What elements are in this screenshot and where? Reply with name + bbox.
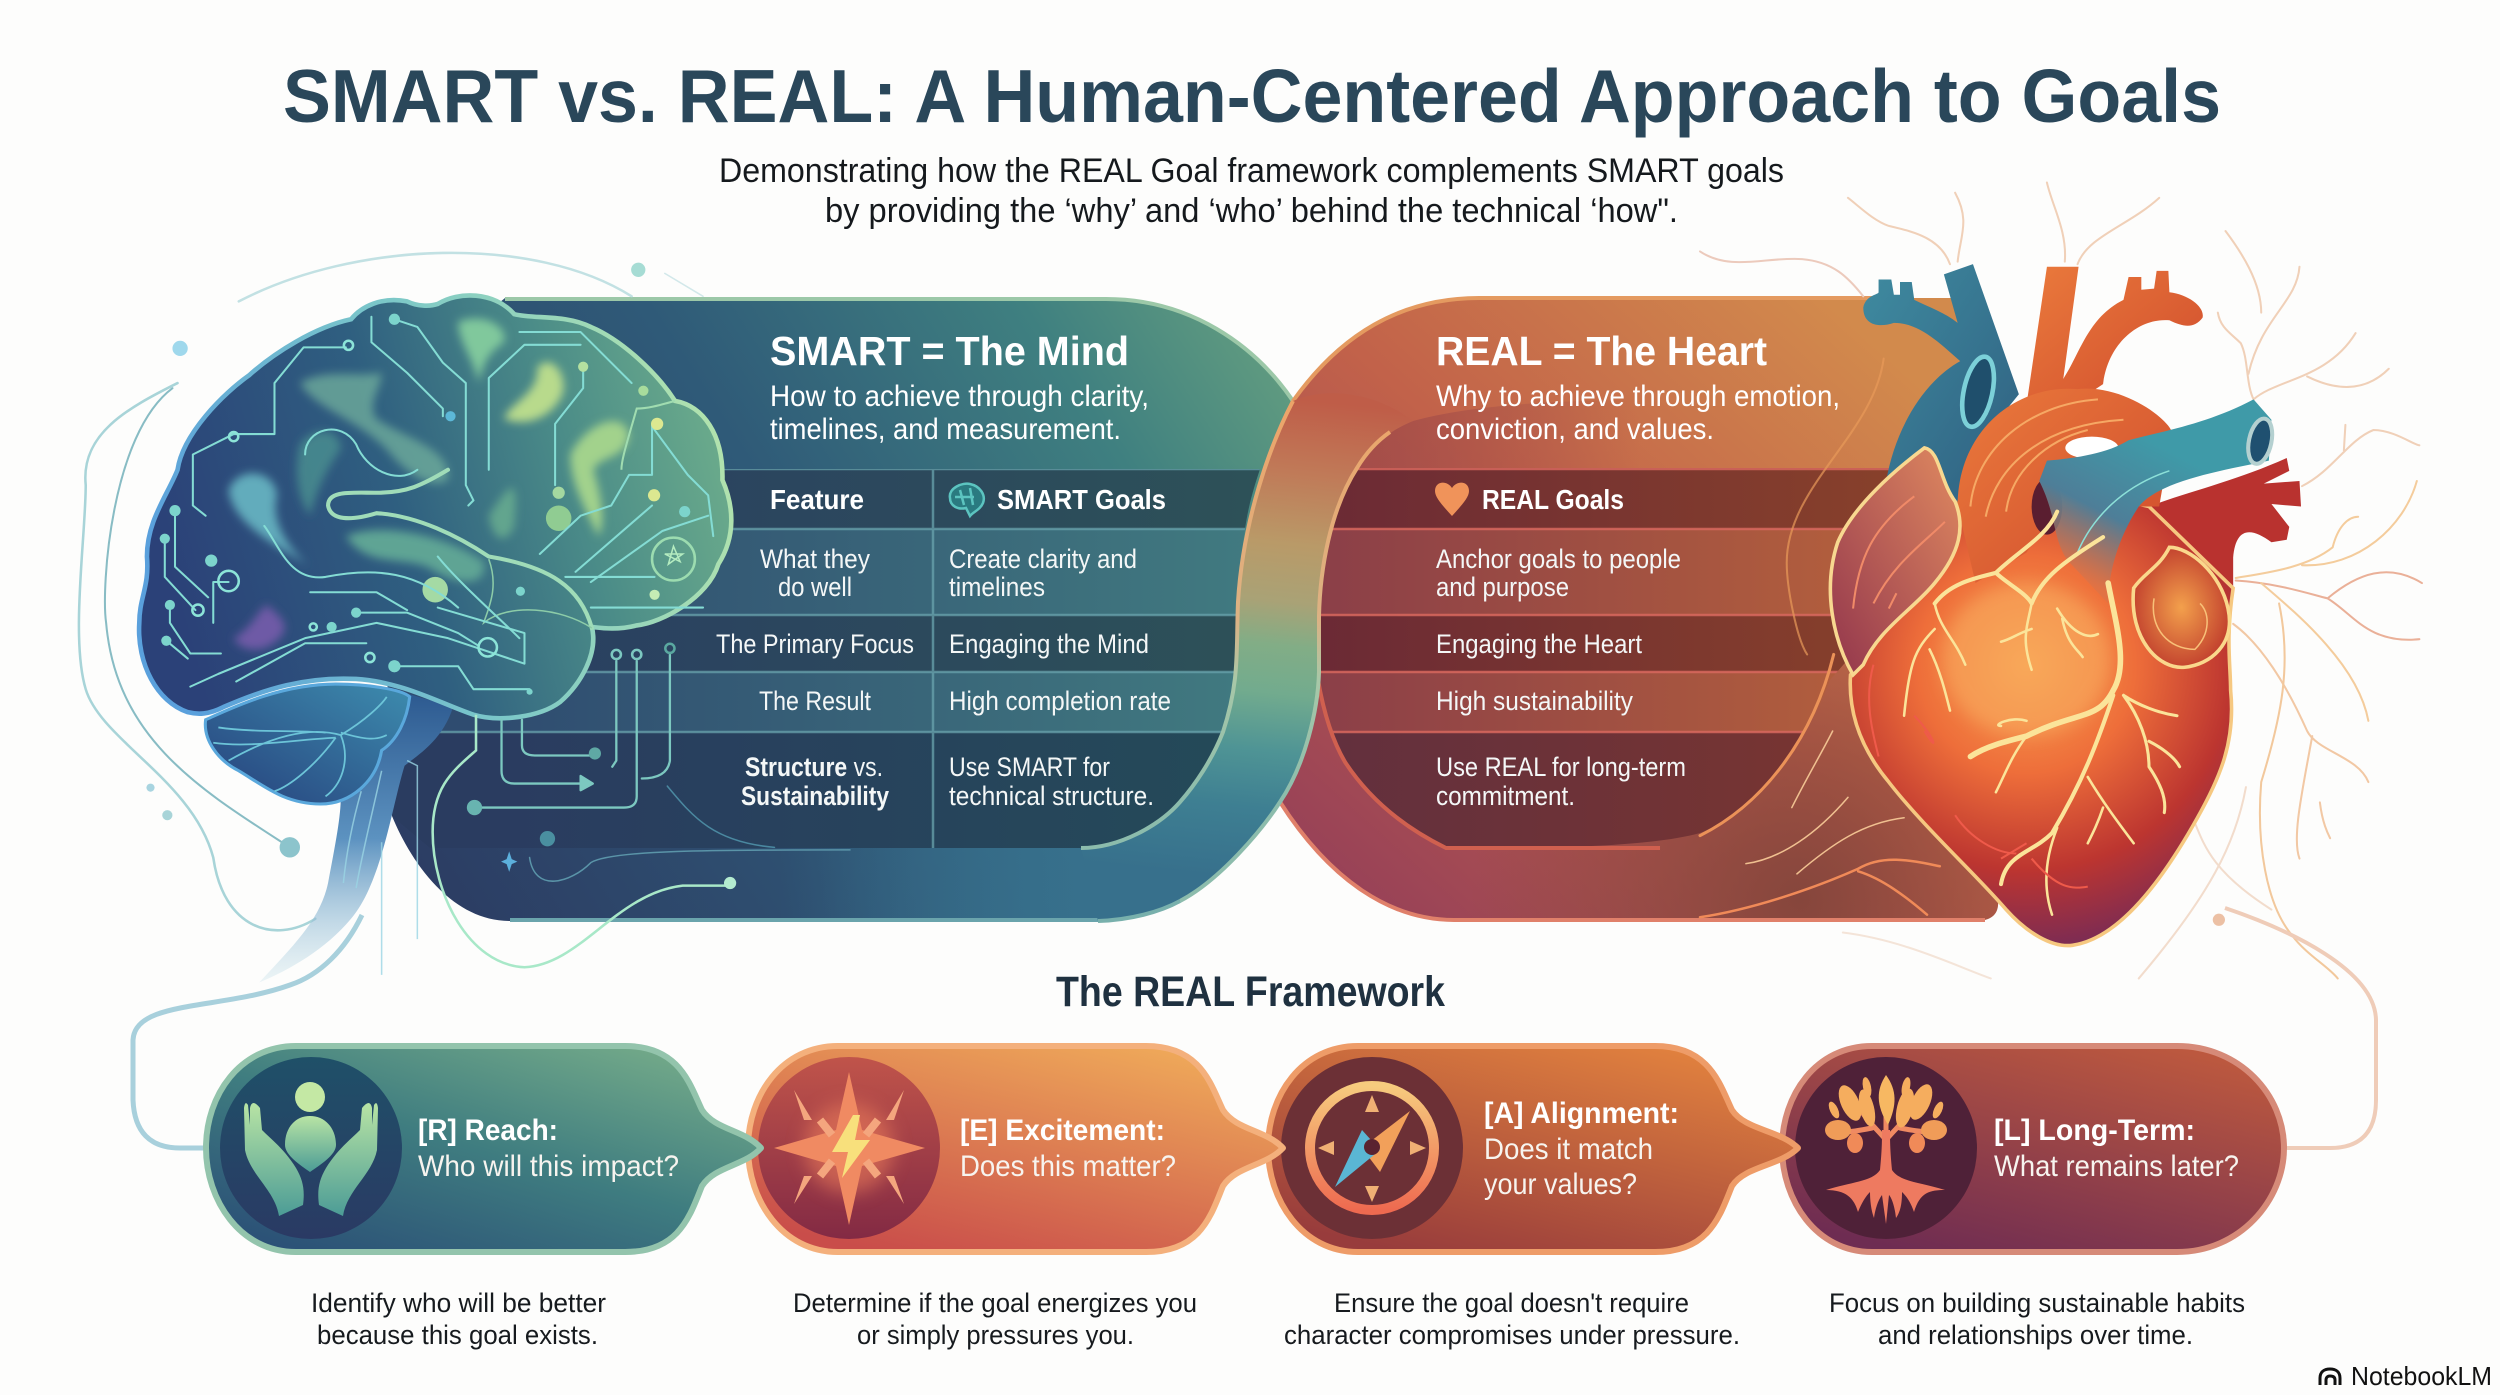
- description: Excitement: [793, 1288, 1197, 1350]
- description: Long-Term: Focus on building sustainable habits: [1829, 1288, 2245, 1318]
- icon: compass: [1310, 1086, 1434, 1210]
- SMART header text: SMART = The Mind: [770, 328, 1129, 374]
- subtitle: by providing the ‘why’ and ‘who’ behind the technical ‘how".: [825, 192, 1678, 230]
- decorative neural swooshes: [79, 253, 703, 930]
- SMART table text: The Result: [759, 686, 871, 716]
- SMART table text: timelines: [949, 572, 1045, 602]
- heart body: [1850, 486, 2233, 946]
- SMART header text: How to achieve through clarity,: [770, 380, 1149, 413]
- pill: Long-Term: [1782, 1046, 2284, 1252]
- pill: Long-Term: [L] Long-Term:: [1994, 1114, 2195, 1147]
- SMART table text: do well: [778, 572, 852, 602]
- REAL header text: REAL = The Heart: [1436, 328, 1767, 374]
- SMART table text: Engaging the Mind: [949, 629, 1149, 659]
- pulmonary artery: [2039, 399, 2271, 603]
- hole and gap: [2065, 437, 2118, 459]
- coronary vessels: [1904, 512, 2180, 915]
- aorta branches: [2027, 267, 2203, 415]
- connector: brain to framework: [133, 915, 362, 1148]
- pill: Reach: [206, 1046, 761, 1252]
- NotebookLM watermark: NotebookLM: [2351, 1361, 2492, 1391]
- description: Long-Term: and relationships over time.: [1878, 1320, 2193, 1350]
- REAL table text: commitment.: [1436, 781, 1575, 811]
- cerebrum: [139, 295, 731, 718]
- REAL table text: High sustainability: [1436, 686, 1633, 716]
- description: Long-Term: [1829, 1288, 2245, 1350]
- REAL table text: REAL Goals: [1482, 484, 1624, 515]
- panel: REAL = The Heart: [1280, 298, 1998, 921]
- pill: Alignment: [1268, 1046, 1798, 1252]
- SMART header text: timelines, and measurement.: [770, 413, 1121, 446]
- description: Alignment: Ensure the goal doesn't require: [1334, 1288, 1689, 1318]
- SMART table text: Sustainability: [741, 781, 889, 811]
- red vessels: [2149, 458, 2301, 593]
- pill: Reach: Who will this impact?: [418, 1150, 679, 1183]
- icon: brain illustration: [79, 253, 850, 983]
- REAL table text: Engaging the Heart: [1436, 629, 1642, 659]
- SMART table text: technical structure.: [949, 781, 1154, 811]
- panel: SMART = The Mind: [380, 298, 1293, 921]
- pill: Excitement: [E] Excitement:: [960, 1114, 1165, 1147]
- REAL table text: and purpose: [1436, 572, 1569, 602]
- subtitle: [719, 152, 1784, 230]
- right atrium flap: [1830, 448, 1960, 675]
- description: Excitement: or simply pressures you.: [857, 1320, 1134, 1350]
- REAL header text: conviction, and values.: [1436, 413, 1714, 446]
- pill: Excitement: Does this matter?: [960, 1150, 1176, 1183]
- SMART header text: [770, 328, 1149, 446]
- SMART table text: High completion rate: [949, 686, 1171, 716]
- circuit traces: [165, 317, 713, 689]
- pill: Alignment: your values?: [1484, 1168, 1637, 1201]
- SMART table text: Feature: [770, 484, 864, 515]
- REAL table text: Anchor goals to people: [1436, 544, 1681, 574]
- left atrium: [2133, 547, 2229, 667]
- vena cava and right atrium: [1863, 264, 2019, 507]
- pill: Alignment: Does it match: [1484, 1133, 1653, 1166]
- pill: Alignment: [A] Alignment:: [1484, 1097, 1679, 1130]
- brain stem: [259, 694, 453, 983]
- description: Alignment: character compromises under pressure.: [1284, 1320, 1740, 1350]
- SMART table rows: [380, 469, 1280, 848]
- REAL header text: Why to achieve through emotion,: [1436, 380, 1840, 413]
- icon: small brain: [950, 484, 984, 516]
- heading: The REAL Framework: The REAL Framework: [1056, 968, 1445, 1016]
- description: Reach: [311, 1288, 606, 1350]
- pill: Reach: [R] Reach:: [418, 1114, 558, 1147]
- ventricle glow: [1942, 583, 2111, 736]
- circuit lines below brain: [476, 654, 850, 881]
- temporal fold: [328, 470, 592, 628]
- description: Reach: Identify who will be better: [311, 1288, 606, 1318]
- cerebellum: [205, 684, 410, 804]
- connector: heart to framework: [2225, 908, 2376, 1148]
- soft lobes: [229, 319, 629, 649]
- SMART table text: Create clarity and: [949, 544, 1137, 574]
- icon: hands holding person: [244, 1082, 378, 1216]
- description: Excitement: Determine if the goal energizes you: [793, 1288, 1197, 1318]
- description: Reach: because this goal exists.: [317, 1320, 598, 1350]
- veins around heart: [1700, 183, 2422, 978]
- SMART table text: Structure vs.: [745, 752, 883, 782]
- arch of aorta: [1958, 389, 2172, 583]
- SMART table text: What they: [760, 544, 870, 574]
- SMART table text: SMART Goals: [997, 484, 1166, 515]
- SMART table text: The Primary Focus: [716, 629, 914, 659]
- icon: small heart: [1435, 483, 1469, 516]
- description: Alignment: [1284, 1288, 1740, 1350]
- SMART table text: [716, 484, 1171, 811]
- REAL table text: [1435, 483, 1686, 811]
- REAL header text: [1436, 328, 1840, 446]
- pill: Long-Term: What remains later?: [1994, 1150, 2239, 1183]
- subtitle: Demonstrating how the REAL Goal framework complements SMART goals: [719, 152, 1784, 190]
- pill: Excitement: [748, 1046, 1283, 1252]
- icon: heart illustration: [1700, 183, 2422, 978]
- interlocking ribbon between panels: [1081, 393, 1413, 921]
- icon: spark with lightning bolt: [774, 1072, 925, 1225]
- inner header tint: [1357, 400, 1640, 469]
- SMART table text: Use SMART for: [949, 752, 1110, 782]
- REAL table rows: [1310, 468, 1920, 848]
- panel veins: [1700, 359, 1940, 917]
- title: SMART vs. REAL: A Human-Centered Approach to Goals: [283, 54, 2221, 138]
- REAL table text: Use REAL for long-term: [1436, 752, 1686, 782]
- icon: tree: [1825, 1075, 1947, 1224]
